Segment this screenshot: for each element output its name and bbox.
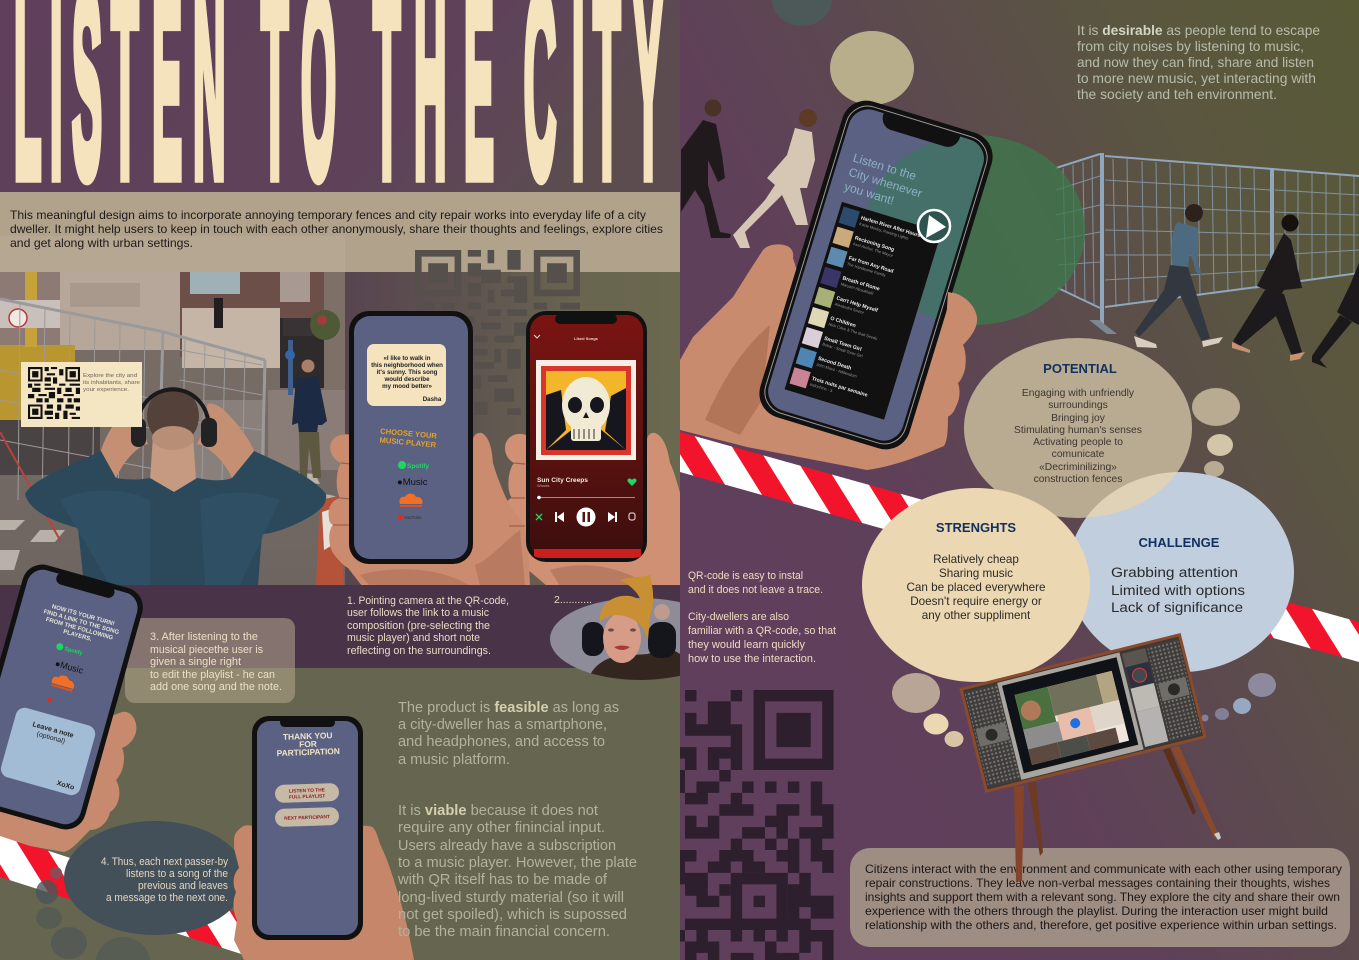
thank you heading: THANK YOU (283, 730, 333, 742)
headphones (582, 622, 604, 656)
bubble: potential: surroundings (1048, 400, 1108, 411)
right hand (197, 403, 254, 478)
viability text: to a music player. However, the plate (398, 854, 637, 871)
tape bottom left (0, 836, 241, 954)
turn instructions: FROM THE FOLLOWING (45, 617, 114, 642)
hero phone headline: Listen to the (851, 151, 918, 183)
playlist: Second Death (817, 356, 852, 372)
overlap of potential and challenge bubbles (1068, 472, 1294, 672)
potential dots (1192, 388, 1240, 477)
bottom summary panel: relationship with the others and, therefore, get positive experience within urban settings. (865, 919, 1337, 932)
turn instructions: NOW ITS YOUR TURN! (51, 604, 115, 627)
bottom summary panel (850, 848, 1350, 947)
caption 3 (125, 618, 295, 703)
caption 1: composition (pre-selecting the (347, 620, 490, 632)
QR explanation text: and it does not leave a trace. (688, 584, 823, 596)
QR explanation text: they would learn quickly (688, 639, 806, 651)
viability text: with QR itself has to be made of (397, 871, 608, 888)
figure: black suit (1232, 214, 1305, 361)
TV controls (1122, 648, 1168, 747)
figure: white suit (733, 109, 817, 248)
playlist (785, 202, 941, 420)
large QR code (674, 690, 834, 960)
bubble: strengths: Relatively cheap (933, 553, 1019, 566)
note card: Leave a note (32, 721, 74, 740)
playlist: Can't Help Myself (836, 296, 879, 314)
caption 4 bubble (64, 821, 246, 935)
note card: this neighborhood when (371, 362, 443, 369)
desirability text: and now they can find, share and listen (1077, 54, 1314, 70)
fence foot (1089, 320, 1117, 334)
traffic cone (316, 496, 344, 585)
intro text: dweller. It might help users to keep in touch with each other anonymously, share their thoughts and feelings, explore cities (10, 222, 663, 236)
playlist: Nick Cave & The Bad Seeds (828, 321, 878, 341)
panel: street photo (0, 272, 345, 585)
thought bubbles top (772, 0, 914, 105)
green circle (865, 135, 1085, 325)
player controls (536, 508, 635, 526)
viability text: Users already have a subscription (398, 837, 616, 854)
bubble: challenge: Lack of significance (1111, 600, 1243, 616)
hands holding two phones (329, 433, 680, 586)
playlist button (275, 783, 339, 803)
logos: Spotify (64, 646, 84, 657)
viability text: long-lived sturdy material (so it will (398, 889, 624, 906)
QR code behind phones (415, 250, 580, 415)
bubble: potential (964, 338, 1192, 518)
playlist: Axel Archer, The Mayor (852, 241, 894, 258)
caption 4 bubble: previous and leaves (138, 880, 228, 892)
title band background (0, 0, 680, 193)
beatles walking figures left (681, 100, 817, 248)
playlist button: FULL PLAYLIST (289, 793, 325, 801)
green overlap on screen (812, 73, 1138, 386)
neck (150, 436, 196, 492)
caption 3: musical piecethe user is (150, 644, 263, 656)
phone: music player chooser (349, 311, 473, 564)
phone: player screen: Woods (537, 483, 549, 488)
TV legs (1014, 746, 1221, 881)
note card (367, 344, 446, 406)
bubble: potential: comunicate (1052, 449, 1105, 460)
bubble: challenge: CHALLENGE (1139, 535, 1220, 550)
play button (918, 210, 950, 242)
note card: XoXo (56, 780, 75, 792)
bubble: potential: «Decriminilizing» (1039, 462, 1117, 473)
bubble: strengths: Sharing music (939, 567, 1013, 580)
bubble: strengths: Can be placed everywhere (906, 581, 1046, 594)
choose heading: MUSIC PLAYER (379, 436, 437, 449)
viability text: not get spoiled), which is supossed (398, 906, 627, 923)
music platform logos (397, 461, 429, 520)
caption 3: given a single right (150, 656, 241, 668)
next participant button: NEXT PARTICIPANT (284, 814, 330, 822)
bubble: potential: Bringing joy (1051, 413, 1106, 424)
bubble: challenge: Grabbing attention (1111, 565, 1238, 581)
turn instructions: PLAYERS. (62, 629, 93, 643)
playlist: Far from Any Road (848, 255, 894, 275)
hand holding tilted phone (0, 712, 136, 852)
tape right (680, 432, 1359, 662)
hand holding thank-you phone (233, 825, 414, 960)
feasibility text: a music platform. (398, 751, 510, 768)
notch (880, 112, 960, 150)
caption 3: add one song and the note. (150, 681, 282, 693)
bottom summary panel: repair constructions. They leave non-verbal messages containing their thoughts, wishes (865, 877, 1330, 890)
playlist: Small Town Girl (823, 336, 863, 353)
dark band behind captions (0, 585, 680, 668)
hand holding hero phone (680, 244, 977, 470)
playlist: The Handsome Family (846, 261, 886, 278)
music platform logos: YouTube (404, 515, 422, 520)
QR note on fence (21, 362, 142, 427)
fingers over thank-you phone (234, 827, 252, 926)
man with headphones (25, 387, 326, 585)
caption 4 bubble: listens to a song of the (126, 868, 228, 880)
left hand (101, 427, 148, 478)
bottom summary panel: experience with the others through the playlist. During the interaction user might build (865, 905, 1328, 918)
playlist: Reckoning Song (854, 235, 895, 253)
pedestrian (292, 360, 327, 478)
logos (41, 642, 89, 709)
fingers over hero phone (932, 292, 977, 418)
note card: Dasha (423, 396, 442, 403)
phone: thank you (252, 716, 363, 940)
figure: denim (1134, 204, 1223, 348)
note card: «I like to walk in (383, 355, 431, 362)
thank you heading (276, 730, 340, 758)
bottom summary panel: Citizens interact with the environment and communicate with each other using temporary (865, 863, 1342, 876)
phone: tilted next turn (0, 560, 148, 834)
playlist: Maryam Aboukhalil (840, 281, 874, 296)
note card (0, 706, 97, 797)
left page (0, 0, 730, 960)
right page background (680, 0, 1359, 960)
hero phone headline: you want! (843, 179, 896, 208)
intro text: and get along with urban settings. (10, 236, 193, 250)
album cover (536, 360, 636, 460)
hero phone headline: City whenever (847, 165, 924, 201)
caption 2 with boy in headphones (550, 575, 680, 680)
turn instructions: FIND A LINK TO THE SONG (43, 609, 120, 636)
intro text (10, 208, 663, 250)
fence graphic (1056, 153, 1359, 325)
bubble: potential: POTENTIAL (1043, 361, 1117, 376)
playlist: Indochine - 3 (810, 382, 834, 393)
choose heading (380, 428, 436, 448)
music platform logos: Spotify (407, 463, 429, 470)
caption 1: reflecting on the surroundings. (347, 645, 491, 657)
phone: player screen: Sun City Creeps (537, 477, 588, 484)
TV screen collage (1015, 671, 1129, 765)
beatles walking figures right (1134, 204, 1359, 368)
QR note on fence: its inhabitants, share (83, 380, 140, 386)
feasibility text: a city-dweller has a smartphone, (398, 716, 607, 733)
feasibility text: The product is feasible as long as (398, 699, 619, 716)
phone: player screen (526, 311, 647, 562)
QR explanation text: familiar with a QR-code, so that (688, 625, 836, 637)
QR explanation text (688, 570, 836, 665)
bottom summary panel: insights and support them with a relevant song. They explore the city and share their own (865, 891, 1340, 904)
bubble: strengths: any other suppliment (922, 609, 1031, 622)
QR explanation text: how to use the interaction. (688, 653, 816, 665)
phone: hero playlist (753, 66, 1138, 495)
QR note on fence: your experience. (83, 387, 129, 393)
playlist: Alexandra Savior (834, 301, 865, 315)
playlist: O Children (829, 316, 857, 329)
playlist: Breath of Rome (842, 275, 880, 293)
road markings (0, 470, 340, 570)
TV thought dots (892, 673, 1276, 747)
desirability text: It is desirable as people tend to escape (1077, 22, 1320, 38)
caption 3: 3. After listening to the (150, 631, 258, 643)
thank you heading: PARTICIPATION (276, 746, 340, 758)
viability text: It is viable because it does not (398, 802, 599, 819)
figure: right edge (1312, 263, 1359, 368)
bubble: potential: construction fences (1034, 474, 1122, 485)
note card: (optional) (36, 731, 66, 745)
desirability text: the society and teh environment. (1077, 86, 1277, 102)
QR explanation text: City-dwellers are also (688, 611, 789, 623)
viability text (397, 802, 637, 940)
playlist: Bohar - Small Town Girl (822, 341, 863, 359)
next participant button (275, 807, 339, 827)
retro TV (959, 633, 1221, 881)
note card: it's sunny. This song (377, 369, 438, 376)
QR note on fence: Explore the city and (83, 373, 137, 379)
bubble: potential: Stimulating human's senses (1014, 425, 1142, 436)
TV body (959, 633, 1207, 793)
bubble: strengths (862, 488, 1090, 682)
note card: my mood better» (382, 383, 432, 390)
choose heading: CHOOSE YOUR (380, 427, 438, 441)
playlist: Trois nuits par semaine (811, 376, 868, 399)
caption 4 bubble: a message to the next one. (106, 892, 228, 904)
caption 1: 1. Pointing camera at the QR-code, (347, 595, 509, 607)
caption 2 with boy in headphones: 2........... (554, 594, 592, 606)
intro text: This meaningful design aims to incorporate annoying temporary fences and city repair works into everyday life of a city (10, 208, 646, 222)
panel: mid background with QR (0, 192, 680, 586)
bubble: potential: Activating people to (1033, 437, 1123, 448)
note card: would describe (383, 376, 430, 383)
progress bar (537, 497, 635, 498)
playlist button: LISTEN TO THE (289, 787, 326, 795)
caption 4 bubble: 4. Thus, each next passer-by (101, 856, 229, 868)
hat (600, 596, 650, 640)
desirability text (1077, 22, 1320, 102)
bubble: challenge (1068, 472, 1294, 672)
caption 1: user follows the link to a music (347, 607, 490, 619)
desirability text: to more new music, yet interacting with (1077, 70, 1316, 86)
head (147, 387, 199, 434)
caption 1 (347, 595, 509, 657)
feasibility text: and headphones, and access to (398, 733, 605, 750)
logos: ●Music (54, 658, 85, 676)
shirt (25, 451, 326, 585)
playlist: John Maus - Addendum (816, 362, 858, 379)
hero phone headline (843, 151, 928, 215)
feasibility text (398, 699, 619, 768)
viability text: to be the main financial concern. (398, 923, 610, 940)
construction fence (0, 299, 265, 520)
phone: player screen: Liked Songs (574, 336, 599, 341)
caption 1: music player) and short note (347, 632, 480, 644)
music platform logos: ●Music (397, 477, 428, 488)
bubble: strengths: STRENGHTS (936, 520, 1016, 535)
QR explanation text: QR-code is easy to instal (688, 570, 803, 582)
caption 3: to edit the playlist - he can (150, 669, 275, 681)
small thought dots (36, 867, 151, 960)
bubble: strengths: Doesn't require energy or (910, 595, 1042, 608)
playlist: Kacie Morley, Passing Lights (859, 221, 909, 241)
intro band (0, 192, 680, 272)
thank you heading: FOR (299, 739, 317, 749)
desirability text: from city noises by listening to music, (1077, 38, 1304, 54)
bubble: challenge: Limited with options (1111, 583, 1245, 599)
viability text: require any other finincial input. (398, 819, 605, 836)
figure: dark suit (681, 100, 731, 238)
playlist: Harlem River After Hours (860, 215, 921, 239)
bubble: potential: Engaging with unfriendly (1022, 388, 1135, 399)
